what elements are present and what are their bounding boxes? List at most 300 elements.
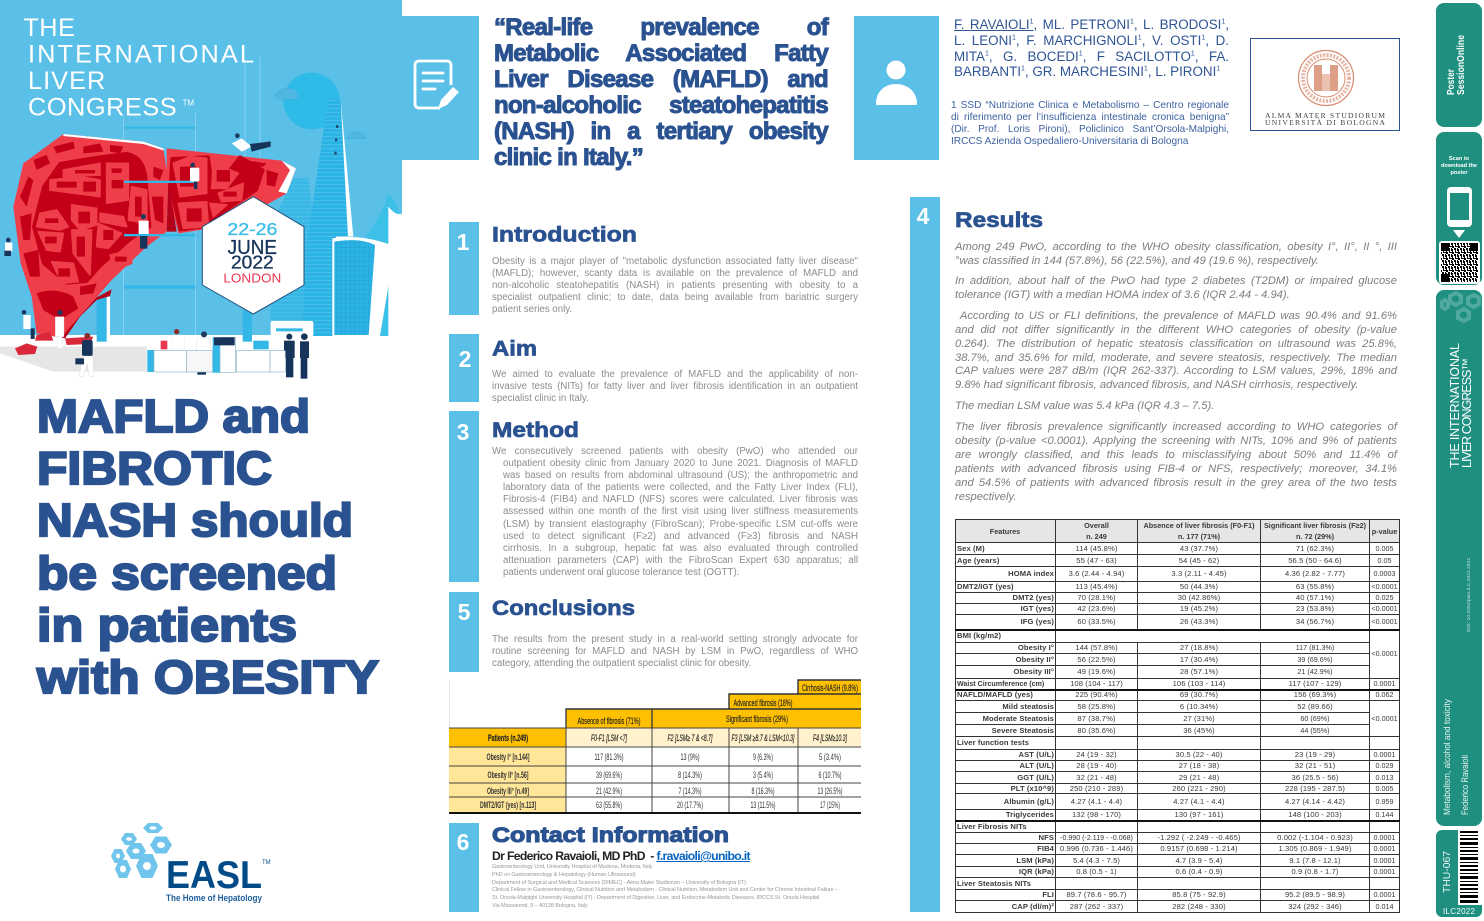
section 4 marker — [910, 197, 940, 912]
heading: Introduction: Introduction — [492, 222, 637, 246]
table: patient features: 27 (31%) — [1183, 714, 1215, 722]
table: patient features: 0.996 (0.736 - 1.446) — [1060, 844, 1133, 853]
text: conclusions — [492, 634, 858, 669]
text: results — [954, 241, 1398, 503]
congress title: TM — [183, 98, 195, 107]
table: patient features: <0.0001 — [1371, 582, 1398, 591]
main takeaway heading: with OBESITY — [36, 651, 379, 703]
table: patient features: 4.36 (2.82 - 7.77) — [1285, 569, 1345, 578]
table: patient features: NAFLD/MAFLD (yes) — [957, 690, 1033, 699]
title: clinic in Italy.” — [494, 144, 643, 171]
table: patient features: 228 (195 - 287.5) — [1285, 784, 1345, 792]
text: method: attenuation parameters (CAP) with the FibroScan Expert 630 apparatus; all — [503, 555, 858, 566]
text: results: In addition, about half of the PwO had type 2 diabetes (T2DM) or impaired glucose — [955, 275, 1397, 287]
main takeaway heading: FIBROTIC — [37, 442, 272, 494]
section 5 marker: 5 — [458, 599, 471, 625]
panel: congress illustration — [0, 0, 402, 379]
header labels: F2 [LSM≥ 7 & <8.7] — [668, 733, 713, 743]
table: patient features: 0.6 (0.4 - 0.9) — [1175, 867, 1223, 876]
text: results: and 54.5% of patients with advanced fibrosis result in the grey area of the two tests — [955, 477, 1397, 489]
table: patient features: 0.8 (0.5 - 1) — [1076, 867, 1117, 876]
table: patient features: 32 (21 - 51) — [1295, 761, 1335, 770]
congress title: CONGRESS — [28, 94, 177, 122]
tab: scan to download with QR code: Scan to — [1449, 156, 1470, 162]
text: results: respectively. — [955, 491, 1016, 503]
table: patient features: 4.27 (4.1 - 4.4) — [1173, 796, 1225, 806]
table: patient features: IQR (kPa) — [1019, 867, 1054, 876]
text: results: patients with advanced fibrosis using FIB-4 or NFS, respectively; moreover, 34.1% — [955, 463, 1397, 475]
title: (NASH) in a tertiary obesity — [494, 118, 828, 145]
table: patient features: DMT2 (yes) — [1012, 593, 1054, 602]
table: patient features: 30.5 (22 - 40) — [1176, 750, 1222, 759]
table: patient features — [955, 519, 1400, 913]
table: patient features: 60 (33.5%) — [1077, 617, 1116, 626]
data rows: 8 (14.3%) — [678, 770, 702, 780]
table: patient features: Mild steatosis — [1002, 702, 1054, 710]
header tiers — [449, 680, 861, 813]
table: patient features: 30 (42.86%) — [1178, 593, 1220, 602]
table: patient features: 23 (53.8%) — [1296, 604, 1334, 613]
text: results: obesity (p-value <0.0001). Applying the screening with NITs, 10% and 9% of patients — [955, 435, 1397, 447]
tab: poster session online: Poster — [1446, 69, 1457, 95]
date hexagon: JUNE — [228, 236, 277, 259]
logo: EASL: The Home of Hepatology — [166, 893, 263, 904]
header labels: Patients (n.249) — [488, 733, 528, 743]
title: non-alcoholic steatohepatitis — [494, 92, 828, 119]
heading: Conclusions: Conclusions — [492, 596, 635, 620]
table: patient features: n. 177 (71%) — [1178, 532, 1220, 541]
table: patient features: 19 (45.2%) — [1180, 604, 1218, 613]
tab: congress information: DOI: 10.3252/pwo.ILC.2022.2022 — [1466, 558, 1471, 632]
date hexagon — [202, 197, 304, 314]
contact affiliations: St. Orsola-Malpighi University Hospital (IT) - Department of Digestive, Liver, and Endocrine-Metabolic Diseases, IRCCS St. Orsola Hospital — [492, 895, 819, 901]
main takeaway heading: NASH should — [37, 494, 353, 546]
table: patient features: 0.0001 — [1374, 856, 1395, 864]
text: results: The median LSM value was 5.4 kPa (IQR 4.3 – 7.5). — [955, 400, 1214, 412]
logo: EASL: EASL — [166, 854, 262, 897]
section 3 marker: 3 — [457, 419, 469, 445]
text: results: tolerance (IGT) with a median HOMA index of 3.6 (IQR 2.44 - 4.94). — [955, 289, 1290, 301]
liver lobules — [37, 157, 243, 283]
table: patient features: n. 72 (29%) — [1296, 532, 1334, 541]
text: results: 9.8% had significant fibrosis, advanced fibrosis, and NASH cirrhosis, respectively. — [955, 379, 1358, 391]
text: conclusions: The results from the present study in a real-world setting strongly advocate for — [492, 634, 858, 645]
section 1 marker — [449, 222, 479, 315]
table: patient features: Obesity III° — [1013, 667, 1054, 676]
title — [494, 14, 830, 171]
table: patient features: 26 (43.3%) — [1180, 617, 1218, 626]
logo: University of Bologna: ALMA MATER STUDIORUM — [1265, 111, 1385, 120]
title: Metabolic Associated Fatty — [494, 40, 828, 67]
text: results: 38.7%, and 35.6% for mild, moderate, and severe steatosis, respectively. The median — [955, 352, 1397, 364]
data rows: 13 (11.5%) — [750, 800, 776, 810]
data rows: 7 (14.3%) — [678, 786, 702, 796]
rubble — [15, 343, 37, 355]
data rows: 17 (15%) — [820, 800, 840, 810]
section 5 marker — [449, 592, 479, 672]
table: patient features: 28 (57.1%) — [1180, 667, 1218, 676]
text: method: patients underwent oral glucose tolerance test (OGTT). — [503, 567, 739, 578]
table: patient features: 0.0001 — [1374, 867, 1395, 876]
scaffold shelves — [124, 127, 196, 289]
tab: poster number and barcode — [1436, 830, 1482, 917]
table: patient features: 89.7 (78.6 - 95.7) — [1066, 890, 1127, 899]
tab: poster number and barcode: THU-067 — [1441, 851, 1453, 893]
section 2 marker — [449, 334, 479, 402]
congress title: THE — [23, 14, 75, 42]
table: patient features: 108 (104 - 117) — [1070, 679, 1123, 688]
table: patient features: 0.062 — [1376, 690, 1394, 699]
table: patient features: 287 (262 - 337) — [1070, 902, 1123, 910]
table: patient features: 39 (69.6%) — [1297, 654, 1333, 664]
table: patient features: Albumin (g/L) — [1004, 796, 1054, 806]
text: method: outpatient obesity clinic from January 2020 to June 2021. Diagnosis of MAFLD — [503, 458, 858, 469]
table: patient features: 0.9 (0.8 - 1.7) — [1291, 867, 1339, 876]
contact affiliations: Department of Surgical and Medical Sciences (DIMEC) - Alma Mater Studiorum – University of Bologna (IT) — [492, 880, 746, 886]
table: patient features: 24 (19 - 32) — [1076, 750, 1117, 759]
text: introduction: Obesity is a major player of "metabolic dysfunction associated fatty liver disease" — [492, 256, 858, 267]
table: patient features: <0.0001 — [1371, 649, 1398, 658]
data rows: Obesity III° [n.49] — [487, 786, 529, 796]
text: introduction — [492, 256, 858, 315]
tab: poster session online: SessionOnline — [1456, 35, 1467, 95]
table: patient features: 34 (56.7%) — [1296, 617, 1334, 626]
tab: congress information: THE INTERNATIONAL — [1448, 343, 1462, 468]
contact name and email: Dr Federico Ravaioli, MD PhD - f.ravaioli@unibo.it — [492, 849, 750, 863]
text: results: Among 249 PwO, according to the WHO obesity classification, obesity I°, II°, II °, III — [955, 241, 1397, 253]
table: patient features: -0.990 (-2.119 - -0.068) — [1060, 834, 1133, 842]
table: patient features: 0.005 — [1376, 544, 1394, 552]
table: patient features: 0.0001 — [1374, 844, 1395, 853]
table: patient features: 114 (45.8%) — [1076, 544, 1117, 552]
table: patient features: 0.002 (-1.104 - 0.923) — [1277, 833, 1353, 842]
table: patient features: 36 (25.5 - 56) — [1292, 772, 1338, 782]
table: patient features: 5.4 (4.3 - 7.5) — [1073, 856, 1120, 864]
data rows: 13 (9%) — [680, 752, 700, 762]
data rows: 21 (42.9%) — [596, 786, 622, 796]
scientists — [4, 133, 309, 379]
table: patient features: DMT2/IGT (yes) — [957, 582, 1014, 591]
table: patient features: 225 (90.4%) — [1075, 690, 1118, 699]
data rows: 9 (6.3%) — [753, 752, 773, 762]
date hexagon: 2022 — [231, 253, 274, 273]
table: patient features: 17 (30.4%) — [1180, 654, 1218, 664]
thin scaffolding — [123, 57, 260, 335]
table: patient features: 0.005 — [1376, 784, 1394, 792]
table: patient features: Age (years) — [957, 556, 999, 564]
table: patient features: 282 (248 - 330) — [1172, 902, 1226, 910]
table: patient features: 0.144 — [1376, 810, 1394, 819]
table: patient features: 58 (25.8%) — [1077, 702, 1116, 710]
table: patient features: -1.292 ( -2.249 - -0.465) — [1157, 833, 1241, 842]
tab: poster session online — [1436, 3, 1482, 127]
text: method: used to detect significant (F≥2) and advanced (F≥3) fibrosis and NASH — [503, 531, 858, 542]
icon panel: authors — [854, 16, 939, 160]
section 6 marker: 6 — [457, 829, 469, 855]
table: patient features: 132 (98 - 170) — [1072, 810, 1121, 819]
table: patient features: Sex (M) — [957, 544, 985, 552]
table: patient features: 324 (292 - 346) — [1288, 902, 1342, 910]
table: patient features: 71 (62.3%) — [1296, 544, 1334, 552]
congress title: INTERNATIONAL — [28, 40, 254, 68]
table: patient features: 4.7 (3.9 - 5.4) — [1175, 856, 1223, 864]
tab: poster number and barcode: ILC2022 — [1443, 907, 1476, 916]
text: method — [492, 446, 858, 578]
table: patient features: ALT (U/L) — [1020, 761, 1054, 770]
table: patient features: HOMA index — [1008, 569, 1054, 578]
table: patient features: 70 (28.1%) — [1077, 593, 1116, 602]
table: patient features: Obesity I° — [1018, 643, 1054, 652]
table: patient features: 148 (100 - 203) — [1288, 810, 1342, 819]
table: patient features: Overall — [1084, 521, 1109, 530]
table: patient features: 0.9157 (0.698 - 1.214) — [1160, 844, 1238, 853]
table: patient features: 21 (42.9%) — [1297, 667, 1333, 676]
tab: congress information: Federico Ravaioli — [1460, 755, 1471, 815]
data rows: 20 (17.7%) — [677, 800, 703, 810]
logo: EASL — [111, 823, 271, 904]
text: aim: We aimed to evaluate the prevalence of MAFLD and the applicability of non- — [492, 369, 858, 380]
table: patient features: 6 (10.34%) — [1180, 702, 1218, 710]
table: patient features: Obesity II° — [1016, 654, 1054, 664]
date hexagon: LONDON — [223, 271, 281, 286]
table: patient features: CAP (dl/m)² — [1012, 902, 1054, 910]
table: patient features: 56 (22.5%) — [1077, 654, 1116, 664]
table: patient features: 117 (81.3%) — [1296, 643, 1334, 652]
table: patient features: 0.0001 — [1374, 679, 1395, 688]
data rows: 63 (55.8%) — [596, 800, 622, 810]
table: patient features: 0.025 — [1376, 593, 1394, 602]
data rows — [480, 752, 842, 810]
text: results: The liver fibrosis prevalence significantly increased according to WHO categories of — [955, 421, 1397, 433]
header labels: Advanced fibrosis (18%) — [734, 698, 793, 708]
table: patient features: Features — [990, 526, 1020, 536]
main takeaway heading — [35, 390, 380, 703]
main takeaway heading: in patients — [37, 599, 297, 651]
date hexagon: 22-26 — [227, 219, 277, 239]
table: patient features: GGT (U/L) — [1017, 772, 1054, 782]
table: patient features: 69 (30.7%) — [1180, 690, 1218, 699]
table: patient features: <0.0001 — [1371, 604, 1398, 613]
table: patient features: 156 (69.3%) — [1294, 690, 1336, 699]
laboratory benches — [147, 337, 285, 373]
table: patient features: 0.0001 — [1374, 890, 1395, 899]
tab: congress information — [1436, 290, 1482, 826]
data rows: Obesity II° [n.56] — [488, 770, 528, 780]
table: patient features: Significant liver fibrosis (F≥2) — [1264, 521, 1366, 530]
header labels: Cirrhosis-NASH (9.8%) — [802, 683, 858, 693]
authors: F. RAVAIOLI1, ML. PETRONI1, L. BRODOSI1, — [954, 17, 1229, 32]
text: method: Fibrosis-4 (FIB4) and NAFLD (NFS) scores were calculated. Liver fibrosis was — [503, 494, 858, 505]
tab: congress information: LIVER CONGRESS™ — [1460, 358, 1474, 468]
table: patient features: 130 (97 - 161) — [1174, 810, 1224, 819]
affiliation — [951, 100, 1229, 147]
text: aim — [492, 369, 858, 404]
table: patient features: 28 (19 - 40) — [1076, 761, 1117, 770]
sidebar: poster session tabs — [1436, 3, 1482, 917]
table: patient features: 27 (18 - 38) — [1179, 761, 1219, 770]
table: patient features: 144 (57.8%) — [1075, 643, 1118, 652]
table: patient features: 117 (107 - 129) — [1289, 679, 1341, 688]
skyline of London — [97, 73, 402, 342]
header labels: F3 [LSM ≥8.7 & LSM<10.3] — [732, 733, 795, 743]
icon panel: document — [402, 16, 479, 160]
tab: congress information: Metabolism, alcohol and toxicity — [1442, 699, 1453, 815]
table: patient features: 42 (23.6%) — [1077, 604, 1116, 613]
table: patient features: 85.8 (75 - 92.9) — [1172, 890, 1226, 899]
header labels: Significant fibrosis (29%) — [726, 714, 788, 724]
text: results: According to US or FLI definitions, the prevalence of MAFLD was 90.4% and 91.6% — [960, 310, 1397, 322]
contact affiliations: Via Massarenti, 9 – 40138 Bologna, Italy — [492, 903, 588, 909]
tab: scan to download with QR code: download the — [1441, 163, 1477, 169]
table: patient features: 106 (103 - 114) — [1173, 679, 1225, 688]
text: method: (LSM) by transient elastography (FibroScan); Probe-specific LSM cut-offs were — [503, 519, 858, 530]
data rows: 6 (10.7%) — [818, 770, 842, 780]
text: introduction: (MAFLD); however, scanty data is available on the prevalence of MAFLD and — [492, 268, 858, 279]
table: patient features: 0.014 — [1376, 902, 1394, 910]
table: patient features: Liver function tests — [957, 738, 1029, 747]
congress title — [23, 14, 254, 122]
text: method: We consecutively screened patients with obesity (PwO) who attended our — [492, 446, 858, 457]
table: patient features: 80 (35.6%) — [1077, 726, 1116, 734]
contact affiliations — [492, 864, 838, 909]
text: method: laboratory data of the patients were collected, and the Fatty Liver Index (FLI), — [503, 482, 858, 493]
text: aim: invasive tests (NITs) for fatty liver and liver fibrosis identification in an outpatient — [492, 381, 858, 392]
table: patient features: 27 (18.8%) — [1180, 643, 1218, 652]
table: patient features: 40 (57.1%) — [1296, 593, 1334, 602]
header labels — [488, 683, 858, 743]
table: patient features: 29 (21 - 48) — [1179, 772, 1219, 782]
table: patient features: Liver Steatosis NITs — [957, 878, 1031, 888]
section 4 marker: 4 — [917, 203, 930, 229]
table: patient features: 43 (37.7%) — [1180, 544, 1218, 552]
table: patient features: FLI — [1042, 890, 1054, 899]
heading: Method: Method — [492, 418, 579, 442]
data rows: 117 (81.3%) — [594, 752, 624, 762]
table: patient features: 52 (89.66) — [1297, 702, 1333, 710]
text: introduction: patient series only. — [492, 304, 572, 315]
logo: University of Bologna — [1250, 38, 1400, 131]
table: patient features: IFG (yes) — [1021, 617, 1054, 626]
section 3 marker — [449, 411, 479, 582]
table: patient features: 0.0001 — [1374, 833, 1395, 842]
title: Liver Disease (MAFLD) and — [494, 66, 828, 93]
table: patient features: 32 (21 - 48) — [1076, 772, 1117, 782]
table: patient features: 1.305 (0.869 - 1.949) — [1278, 844, 1352, 853]
table: patient features: 36 (45%) — [1183, 726, 1215, 734]
main takeaway heading: be screened — [37, 547, 337, 599]
heading: Contact Information: Contact Information — [492, 823, 729, 847]
table: patient features: 260 (221 - 290) — [1172, 784, 1226, 792]
table: patient features: 23 (19 - 29) — [1295, 750, 1335, 759]
title: “Real-life prevalence of — [494, 14, 828, 41]
table: patient features: 4.27 (4.1 - 4.4) — [1071, 796, 1122, 806]
congress title: LIVER — [28, 67, 105, 95]
affiliation: di riferimento per l’insufficienza intestinale cronica benigna” — [951, 112, 1229, 123]
table: patient features: 0.0003 — [1374, 569, 1395, 578]
text: results: 0.264). The distribution of hepatic steatosis classification on ultrasound was 25.8%, — [955, 338, 1397, 350]
grid lines — [449, 709, 861, 813]
data rows: 8 (16.3%) — [752, 786, 774, 796]
data rows: Obesity I° [n.144] — [486, 752, 530, 762]
text: aim: specialist clinic in Italy. — [492, 393, 589, 404]
table: patient features: 56.5 (50 - 64.6) — [1288, 556, 1342, 564]
table: patient features: 87 (38.7%) — [1077, 714, 1116, 722]
text: results: are wrongly classified, and this leads to misclassifying about 50% and 11.4% of — [955, 449, 1397, 461]
authors — [954, 17, 1229, 79]
table: patient features: 60 (69%) — [1300, 714, 1330, 722]
section 6 marker — [449, 823, 479, 912]
table: patient features: 0.959 — [1376, 796, 1394, 806]
table: patient features: 50 (44.3%) — [1180, 582, 1218, 591]
table: patient features: 250 (210 - 289) — [1070, 784, 1123, 792]
table: patient features: NFS — [1038, 833, 1054, 842]
data rows: 39 (69.6%) — [596, 770, 622, 780]
section 2 marker: 2 — [459, 346, 471, 372]
heading: Results: Results — [955, 208, 1043, 232]
text: method: was based on results from abdominal ultrasound (US); the anthropometric and — [503, 470, 858, 481]
liver — [13, 134, 296, 355]
table: patient features: FIB4 — [1037, 844, 1054, 853]
table: patient features: n. 249 — [1086, 532, 1107, 541]
heading: Aim: Aim — [492, 336, 537, 360]
table: patient features: 9.1 (7.8 - 12.1) — [1289, 856, 1341, 864]
authors: MITA1, G. BOCEDI1, F SACILOTTO1, FA. — [954, 49, 1229, 64]
table: patient features: 3.3 (2.11 - 4.45) — [1171, 569, 1227, 578]
ground shadow — [0, 347, 147, 372]
table: patient features: 54 (45 - 62) — [1179, 556, 1219, 564]
table: patient features: 0.029 — [1376, 761, 1394, 770]
text: introduction: specialist outpatient clinic; to date, data being available from bariatric surgery — [492, 292, 858, 303]
text: results: and did not differ significantly in the different WHO categories of obesity (p-value — [955, 324, 1397, 336]
table: patient features: 0.05 — [1378, 556, 1392, 564]
table: patient features: <0.0001 — [1371, 714, 1398, 722]
data rows: 13 (26.5%) — [818, 786, 842, 796]
text: results: °was classified in 144 (57.8%), 56 (22.5%), and 49 (19.6 %), respectively. — [955, 255, 1319, 267]
table: patient features: 49 (19.6%) — [1077, 667, 1116, 676]
logo: University of Bologna: UNIVERSITÀ DI BOLOGNA — [1265, 117, 1386, 127]
table: patient features: BMI (kg/m2) — [957, 631, 1001, 640]
table: patient features: Moderate Steatosis — [983, 714, 1054, 722]
tab: scan to download with QR code: poster — [1450, 170, 1468, 176]
section 1 marker: 1 — [457, 229, 470, 255]
table: patient features: Severe Steatosis — [992, 726, 1054, 734]
table: patient features: Waist Circumference (cm) — [957, 680, 1044, 688]
contact affiliations: Clinical Fellow in Gastroenterology, Clinical Nutrition and Metabolism - Clinical Nutrition, Metabolism Unit and Center for Chronic Intestinal Failure – — [492, 887, 838, 893]
header labels: F0-F1 [LSM <7] — [591, 733, 627, 743]
header labels: Absence of fibrosis (71%) — [578, 716, 641, 726]
tab: scan to download with QR code — [1436, 132, 1482, 285]
table: patient features: IGT (yes) — [1021, 604, 1054, 613]
main takeaway heading: MAFLD and — [37, 390, 310, 442]
text: conclusions: routine screening for MAFLD and NASH by LSM in PwO, regardless of WHO — [492, 646, 858, 657]
table: patient features: Absence of liver fibrosis (F0-F1) — [1143, 521, 1255, 530]
affiliation: 1 SSD “Nutrizione Clinica e Metabolismo – Centro regionale — [951, 100, 1229, 111]
table: fibrosis prevalence by obesity class — [449, 679, 861, 814]
contact affiliations: Gastroenterology Unit, University Hospital of Modena, Modena, Italy — [492, 864, 652, 870]
data rows: 3 (5.4%) — [753, 770, 773, 780]
affiliation: IRCCS Azienda Ospedaliero-Universitaria di Bologna — [951, 136, 1188, 147]
text: conclusions: category, attending the outpatient specialist clinic for obesity. — [492, 658, 751, 669]
authors: L. LEONI1, F. MARCHIGNOLI1, V. OSTI1, D. — [954, 33, 1229, 48]
text: method: cirrhosis. In a subgroup, hepatic fat was also evaluated through controlled — [503, 543, 858, 554]
header labels: F4 [LSM≥10.3] — [813, 733, 847, 743]
table: patient features: AST (U/L) — [1018, 750, 1054, 759]
table: patient features: Triglycerides — [1006, 810, 1054, 819]
table: patient features: 4.27 (4.14 - 4.42) — [1285, 796, 1345, 806]
table: patient features: 63 (55.8%) — [1296, 582, 1334, 591]
table: patient features: 95.2 (89.5 - 98.9) — [1285, 890, 1345, 899]
affiliation: (Dir. Prof. Loris Pironi), Policlinico Sant’Orsola-Malpighi, — [951, 124, 1229, 135]
